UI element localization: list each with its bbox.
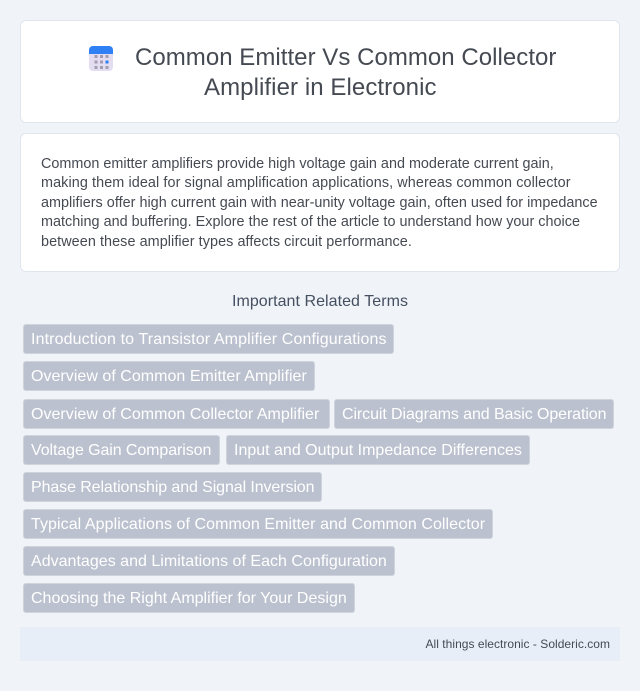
intro paragraph [41,156,598,250]
intro paragraph: matching and buffering. Explore the rest of the article to understand how your choice [41,214,580,230]
related terms heading: Important Related Terms [232,293,408,310]
tag: Typical Applications of Common Emitter and Common Collector [31,516,485,533]
title text [135,44,556,101]
tag [23,546,395,576]
intro paragraph: amplifiers offer high current gain with near-unity voltage gain, often used for impedance [41,195,598,211]
tag: Voltage Gain Comparison [31,442,211,459]
tag: Phase Relationship and Signal Inversion [31,479,314,496]
tag: Overview of Common Collector Amplifier [31,406,319,423]
tag: Circuit Diagrams and Basic Operation [342,406,606,423]
tag [23,435,220,465]
tag [23,399,330,429]
footer credit: All things electronic - Solderic.com [426,637,610,651]
related terms tags [23,324,614,613]
tag [23,509,493,539]
tag [334,399,614,429]
tag: Input and Output Impedance Differences [234,442,522,459]
tag [23,324,394,354]
tag [23,583,355,613]
icon: calendar [89,46,113,71]
intro paragraph: between these amplifier types affects circuit performance. [41,234,412,250]
title text: Amplifier in Electronic [204,74,437,101]
intro text panel [20,133,620,272]
tag: Choosing the Right Amplifier for Your Design [31,590,347,607]
footer bar [20,627,620,661]
title panel [20,20,620,123]
tag [23,361,315,391]
tag: Advantages and Limitations of Each Configuration [31,553,387,570]
intro paragraph: making them ideal for signal amplification applications, whereas common collector [41,175,571,191]
intro paragraph: Common emitter amplifiers provide high voltage gain and moderate current gain, [41,156,554,172]
tag [226,435,530,465]
title text: Common Emitter Vs Common Collector [135,44,556,71]
tag: Introduction to Transistor Amplifier Configurations [31,331,387,348]
tag: Overview of Common Emitter Amplifier [31,368,307,385]
tag [23,472,322,502]
